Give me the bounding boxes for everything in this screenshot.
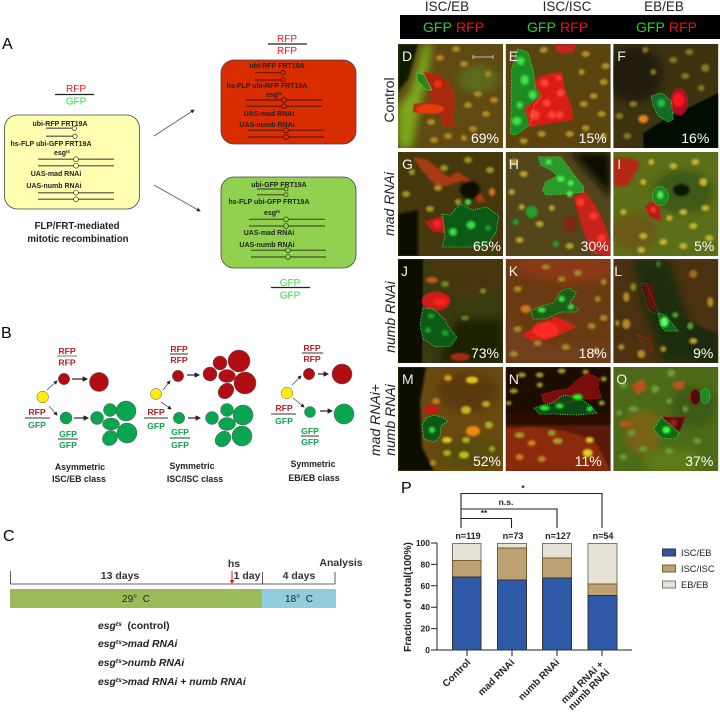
n labels: [455, 531, 613, 541]
micrograph D: 69%: [471, 130, 499, 146]
heat shock arrow: [230, 571, 234, 584]
genotype labels EB/EB: GFP: [275, 416, 293, 426]
genotype list: >mad RNAi: [122, 639, 179, 650]
x axis labels: mad RNAi +: [559, 659, 606, 706]
micrograph G: 65%: [473, 238, 501, 254]
29 C bar: 29° C: [122, 594, 150, 605]
red homozygous cell box: UAS-mad RNAi: [244, 111, 294, 118]
caption: FLP/FRT-mediated mitotic recombination: mitotic recombination: [27, 234, 129, 245]
red homozygous cell box: ubi-RFP FRT19A: [249, 63, 305, 70]
black channel header bar: GFP: [636, 19, 665, 35]
y axis: 60: [421, 581, 430, 591]
bar: Control: [452, 544, 481, 650]
genotype list: esg: [98, 621, 116, 632]
genotype list: ts: [116, 658, 122, 665]
parent cell box: hs-FLP ubi-GFP FRT19A: [10, 141, 92, 148]
micrograph F: 16%: [681, 130, 709, 146]
micrograph N: 11%: [575, 453, 602, 469]
micrograph J: 73%: [471, 345, 499, 361]
genotype labels EB/EB: GFP: [301, 437, 319, 447]
timeline axis: [10, 571, 335, 584]
caption: Symmetric EB/EB class: [288, 459, 340, 483]
genotype list: ts: [116, 677, 122, 684]
row labels: mad RNAi+: [367, 384, 383, 456]
legend: ISC/ISC: [681, 564, 715, 574]
18 C bar: [262, 589, 336, 608]
arrow to red cell: [154, 110, 194, 136]
genotype list: >mad RNAi + numb RNAi: [122, 677, 247, 688]
parent genotype label: RFP: [66, 84, 86, 95]
micrograph E: [506, 44, 611, 148]
micrograph K: [506, 259, 611, 363]
black channel header bar: GFP: [527, 19, 556, 35]
micrograph J: [398, 259, 503, 363]
green homozygous cell box: hs-FLP ubi-GFP FRT19A: [228, 199, 310, 206]
green homozygous cell box: ubi-GFP FRT19A: [251, 182, 307, 189]
y axis: 0: [425, 645, 430, 655]
panel letter B: B: [1, 325, 12, 342]
parent cell box: ts: [66, 149, 71, 154]
micrograph M: M: [402, 371, 414, 387]
genotype labels ISC/EB: RFP: [58, 346, 76, 356]
parent cell box: esg: [54, 150, 66, 157]
genotype labels ISC/EB: GFP: [59, 429, 77, 439]
micrograph F: [603, 44, 718, 148]
genotype labels ISC/EB: GFP: [28, 420, 46, 430]
timeline labels: 1 day: [234, 570, 261, 582]
red homozygous cell box: esg: [266, 92, 278, 99]
micrograph O: 37%: [685, 453, 713, 469]
asymmetric ISC/EB class diagram: [37, 372, 137, 449]
red homozygous cell box: ts: [278, 91, 283, 96]
timeline labels: 13 days: [101, 570, 139, 582]
green homozygous cell box: esg: [264, 210, 276, 217]
bar: numb RNAi: [542, 544, 572, 650]
genotype labels ISC/ISC: GFP: [171, 427, 189, 437]
row labels: Control: [381, 77, 397, 123]
micrograph I: I: [617, 156, 621, 172]
legend: [662, 548, 715, 590]
genotype labels ISC/ISC: GFP: [171, 440, 189, 450]
parent cell box: ubi-RFP FRT19A: [32, 121, 88, 128]
micrograph F: F: [617, 48, 626, 64]
timeline labels: [101, 557, 363, 582]
legend: ISC/EB: [681, 548, 711, 558]
genotype labels EB/EB: RFP: [275, 403, 293, 413]
column headers: [425, 0, 684, 14]
micrograph M: [398, 367, 503, 471]
black channel header bar: RFP: [560, 19, 588, 35]
micrograph L: [613, 259, 718, 363]
significance brackets: [461, 494, 602, 528]
red homozygous cell box: hs-FLP ubi-RFP FRT19A: [227, 83, 307, 90]
genotype list: esg: [98, 677, 116, 688]
green genotype label: GFP: [280, 278, 301, 289]
n labels: n=73: [503, 531, 523, 541]
genotype list: esg: [98, 658, 116, 669]
x axis labels: numb RNAi: [517, 657, 562, 703]
y axis title: Fraction of total(100%): [403, 542, 414, 652]
micrograph K: 18%: [579, 345, 607, 361]
genotype labels ISC/ISC: GFP: [147, 421, 165, 431]
parent cell box: UAS-mad RNAi: [31, 171, 81, 178]
n labels: n=119: [455, 531, 481, 541]
significance labels: n.s.: [499, 497, 513, 507]
parent genotype label: [55, 84, 94, 108]
green homozygous cell box: UAS-mad RNAi: [244, 230, 294, 237]
arrow to green cell: [154, 185, 200, 211]
parent genotype label: GFP: [66, 96, 87, 108]
genotype list: [98, 621, 247, 688]
genotype labels EB/EB: RFP: [303, 354, 321, 364]
y axis: 40: [421, 602, 430, 612]
genotype labels EB/EB: GFP: [301, 426, 319, 436]
panel P: stacked bar chart: [401, 480, 715, 712]
x axis labels: Control: [441, 657, 473, 690]
green homozygous cell box: UAS-numb RNAi: [239, 242, 295, 249]
black channel header bar: RFP: [456, 19, 484, 35]
micrograph N: [506, 367, 611, 471]
red genotype label: [268, 34, 307, 57]
caption: Asymmetric ISC/EB class: [52, 462, 106, 484]
genotype list: ts: [116, 621, 122, 628]
caption: Symmetric EB/EB class: Symmetric: [290, 459, 336, 469]
micrograph H: [506, 152, 611, 256]
caption: Symmetric ISC/ISC class: [167, 461, 223, 484]
n labels: n=54: [593, 531, 613, 541]
genotype labels ISC/ISC: RFP: [170, 344, 188, 354]
micrograph D: D: [402, 48, 412, 64]
micrograph K: K: [509, 263, 519, 279]
green genotype label: [271, 278, 310, 302]
green homozygous cell box: [221, 177, 356, 268]
micrograph O: [613, 367, 718, 476]
genotype list: ts: [116, 639, 122, 646]
genotype labels ISC/EB: RFP: [28, 407, 46, 417]
black channel header bar: GFP: [423, 19, 452, 35]
18 C bar: 18° C: [285, 594, 313, 605]
parent cell box: UAS-numb RNAi: [26, 183, 82, 190]
micrograph H: 30%: [581, 238, 609, 254]
micrograph L: 9%: [693, 345, 713, 361]
caption: Asymmetric ISC/EB class: Asymmetric: [55, 462, 105, 472]
genotype labels EB/EB: [271, 343, 323, 447]
row labels: numb RNAi: [382, 383, 398, 456]
genotype labels EB/EB: RFP: [303, 343, 321, 353]
micrograph L: L: [614, 263, 622, 279]
parent cell box: [4, 115, 140, 209]
micrograph G: [398, 152, 503, 256]
bar: mad RNAi + numb RNAi: [588, 544, 617, 650]
y axis: 100: [416, 538, 430, 548]
black channel header bar: RFP: [669, 19, 697, 35]
caption: Symmetric ISC/ISC class: Symmetric: [170, 461, 215, 471]
micrograph E: 15%: [579, 130, 607, 146]
genotype labels ISC/ISC: RFP: [170, 355, 188, 365]
green genotype label: GFP: [280, 290, 301, 302]
timeline labels: Analysis: [319, 557, 363, 569]
legend: EB/EB: [681, 580, 708, 590]
micrograph G: G: [402, 156, 413, 172]
row labels: numb RNAi: [382, 280, 398, 353]
row labels: mad RNAi: [381, 171, 397, 236]
micrograph I: 5%: [694, 238, 714, 254]
genotype labels ISC/ISC: [144, 344, 190, 450]
panel letter C: C: [3, 528, 15, 545]
bar: mad RNAi: [498, 544, 526, 650]
panel C: experimental timeline: [3, 528, 363, 688]
genotype list: >numb RNAi: [122, 658, 185, 669]
micrograph O: O: [616, 371, 627, 387]
caption: FLP/FRT-mediated mitotic recombination: FLP/FRT-mediated: [34, 221, 120, 232]
genotype list: (control): [122, 621, 170, 632]
micrograph D: [398, 44, 503, 148]
red genotype label: RFP: [277, 46, 297, 57]
genotype list: esg: [98, 639, 116, 650]
y axis: [416, 538, 632, 656]
black channel header bar: [400, 15, 720, 39]
genotype labels ISC/EB: RFP: [58, 358, 76, 368]
symmetric ISC/ISC class diagram: [150, 350, 256, 450]
micrograph J: J: [401, 263, 408, 279]
caption: Asymmetric ISC/EB class: ISC/EB class: [52, 474, 106, 484]
caption: Symmetric EB/EB class: EB/EB class: [288, 473, 340, 483]
y axis: 80: [421, 559, 430, 569]
panel letter A: A: [2, 36, 13, 53]
genotype labels ISC/EB: [25, 346, 78, 450]
panel letter P: P: [401, 480, 412, 497]
genotype labels ISC/EB: GFP: [59, 440, 77, 450]
micrograph H: H: [509, 156, 519, 172]
y axis: 20: [421, 624, 430, 634]
red genotype label: RFP: [277, 34, 297, 45]
row labels: [367, 77, 398, 456]
n labels: n=127: [545, 531, 571, 541]
significance labels: [481, 483, 525, 518]
significance labels: **: [481, 508, 488, 518]
x axis labels: numb RNAi: [567, 667, 612, 712]
red homozygous cell box: UAS-numb RNAi: [239, 122, 295, 129]
red homozygous cell box: [221, 60, 356, 144]
x axis labels: [441, 657, 612, 712]
panel A: mitotic recombination: [2, 34, 356, 302]
genotype labels ISC/ISC: RFP: [147, 407, 165, 417]
green homozygous cell box: ts: [276, 209, 281, 214]
caption: FLP/FRT-mediated mitotic recombination: [27, 221, 129, 245]
panel B: division classes: [1, 325, 354, 484]
29 C bar: [10, 589, 262, 608]
significance labels: *: [521, 483, 525, 493]
caption: Symmetric ISC/ISC class: ISC/ISC class: [167, 474, 223, 484]
x axis labels: mad RNAi: [476, 657, 517, 698]
micrograph N: N: [509, 371, 519, 387]
timeline labels: 4 days: [283, 570, 315, 582]
timeline labels: hs: [228, 558, 240, 570]
micrograph M: 52%: [473, 453, 501, 469]
micrograph I: [609, 152, 718, 256]
micrograph E: E: [509, 48, 518, 64]
symmetric EB/EB class diagram: [281, 364, 354, 424]
